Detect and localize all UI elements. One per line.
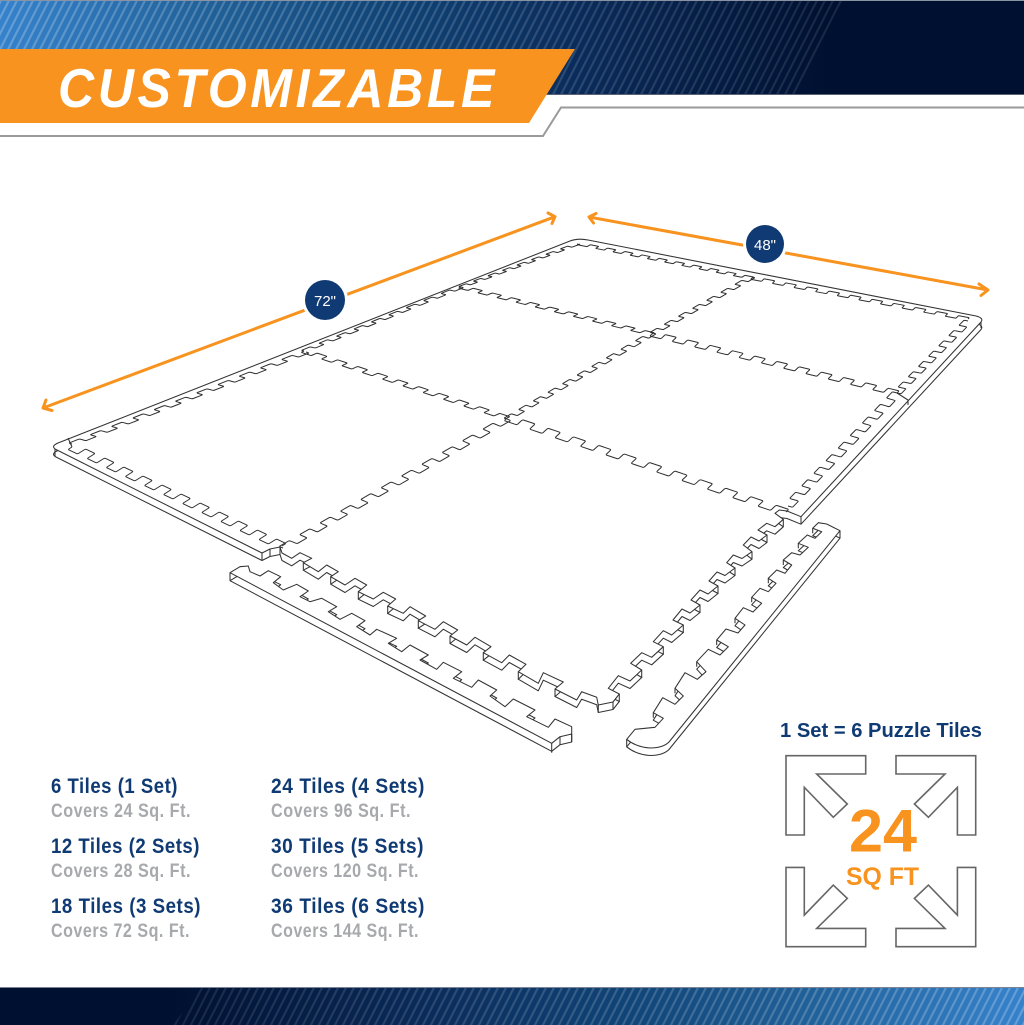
coverage list: column two xyxy=(271,775,425,942)
icon: four expanding corner arrows xyxy=(786,756,976,947)
row: 18 tiles: Covers 72 Sq. Ft. xyxy=(51,921,190,942)
row: 18 tiles: 18 Tiles (3 Sets) xyxy=(51,895,201,918)
row: 30 tiles: Covers 120 Sq. Ft. xyxy=(271,861,419,882)
tile seams xyxy=(279,276,899,550)
row: 6 tiles xyxy=(51,775,191,822)
row: 12 tiles xyxy=(51,835,200,882)
footer band xyxy=(0,987,1024,1025)
coverage list: column one xyxy=(51,775,201,942)
row: 6 tiles: 6 Tiles (1 Set) xyxy=(51,775,178,798)
area unit: SQ FT xyxy=(846,863,919,891)
row: 6 tiles: Covers 24 Sq. Ft. xyxy=(51,801,191,822)
row: 18 tiles xyxy=(51,895,201,942)
row: 36 tiles: Covers 144 Sq. Ft. xyxy=(271,921,419,942)
assembled mat body xyxy=(54,239,982,712)
title: CUSTOMIZABLE xyxy=(58,57,498,119)
set size heading: 1 Set = 6 Puzzle Tiles xyxy=(780,720,982,742)
header band xyxy=(0,0,1024,95)
title banner xyxy=(0,49,575,123)
dimension arrow: 48 inch: 48" xyxy=(754,237,776,254)
mat border interlock teeth xyxy=(68,243,972,548)
row: 36 tiles xyxy=(271,895,425,942)
row: 36 tiles: 36 Tiles (6 Sets) xyxy=(271,895,425,918)
puzzle mat diagram xyxy=(54,239,982,755)
row: 24 tiles: Covers 96 Sq. Ft. xyxy=(271,801,411,822)
row: 30 tiles: 30 Tiles (5 Sets) xyxy=(271,835,424,858)
header rule xyxy=(0,108,1024,136)
dimension arrow: 72 inch: 72" xyxy=(314,293,336,310)
loose border strip: front xyxy=(230,566,572,753)
row: 24 tiles: 24 Tiles (4 Sets) xyxy=(271,775,425,798)
dimension arrow: 72 inch xyxy=(43,213,555,410)
row: 12 tiles: 12 Tiles (2 Sets) xyxy=(51,835,200,858)
row: 12 tiles: Covers 28 Sq. Ft. xyxy=(51,861,191,882)
row: 30 tiles xyxy=(271,835,424,882)
area figure: 24 xyxy=(849,798,918,864)
row: 24 tiles xyxy=(271,775,425,822)
dimension arrow: 48 inch xyxy=(589,214,988,296)
loose border strip: right xyxy=(627,523,840,756)
